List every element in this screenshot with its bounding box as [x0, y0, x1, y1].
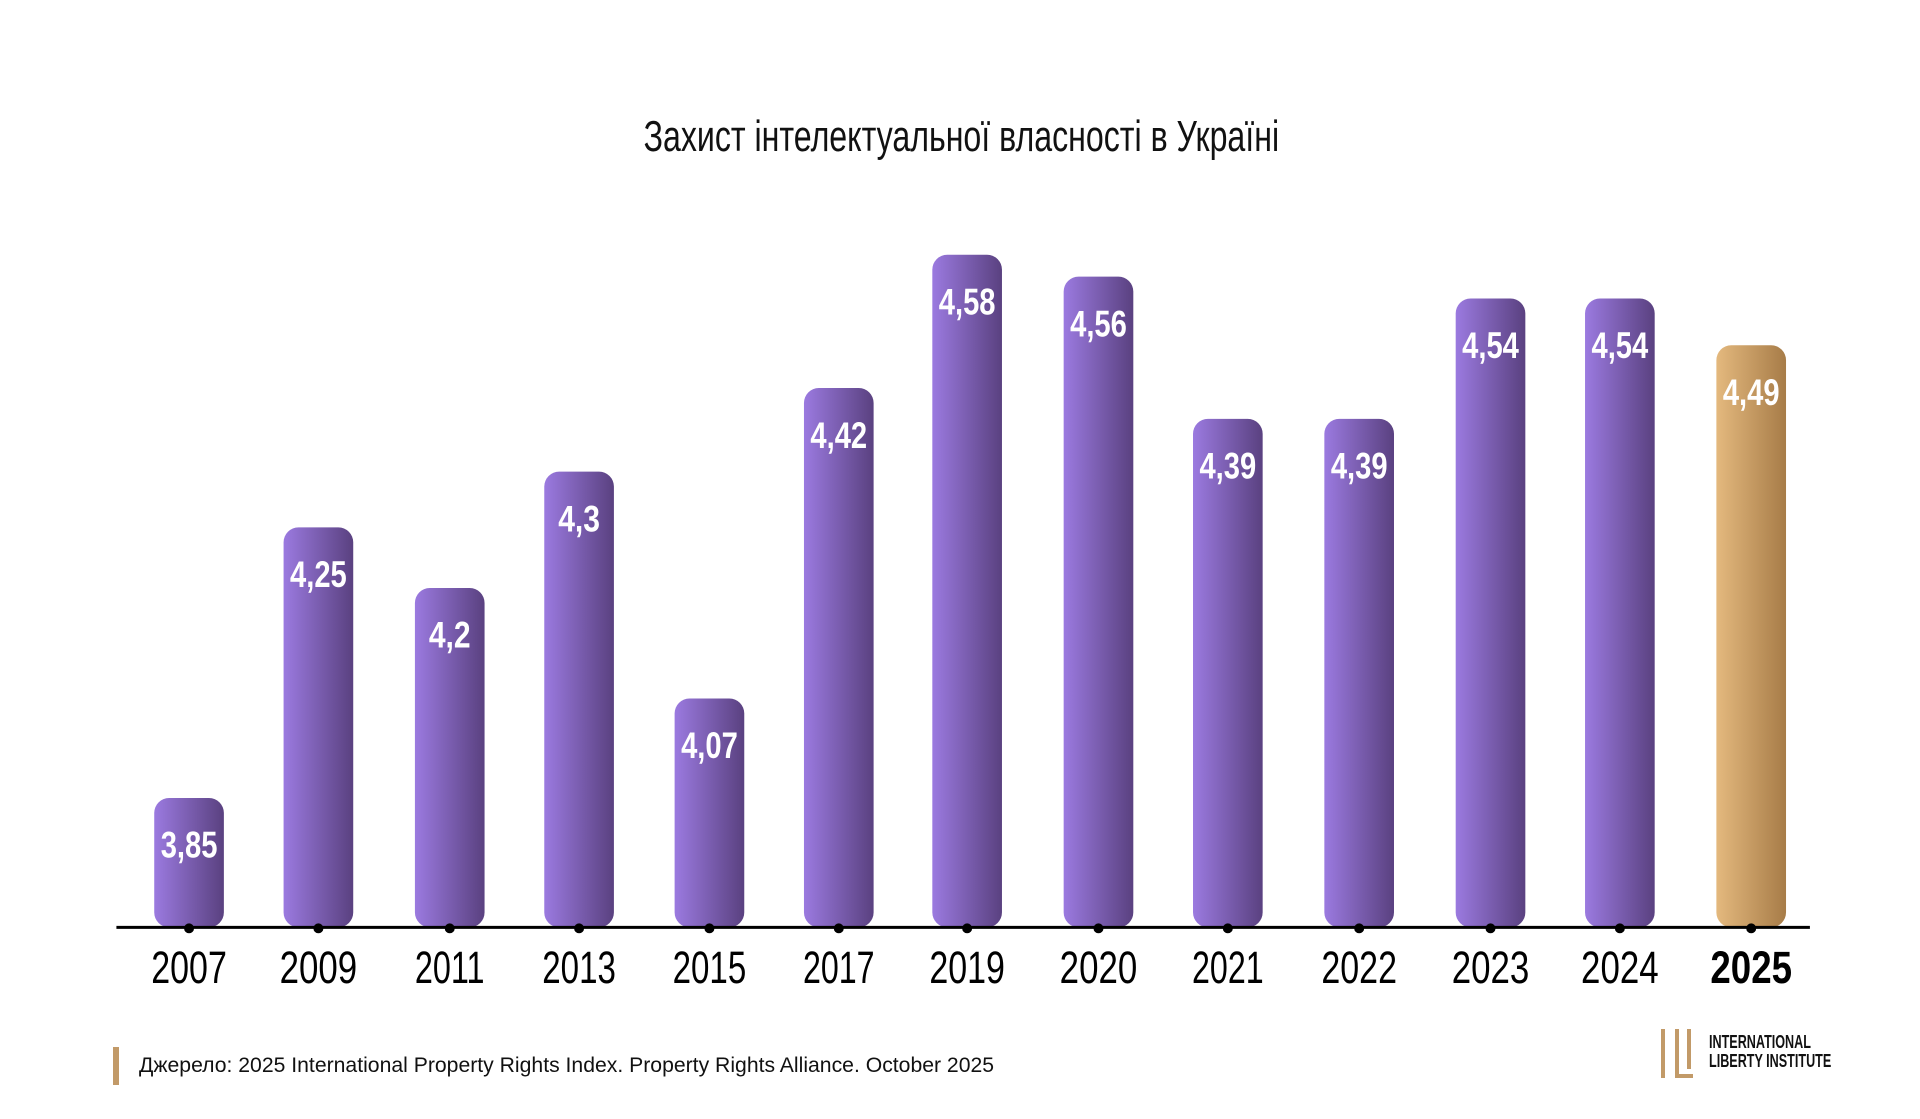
bar 2015	[675, 698, 744, 927]
title: Захист інтелектуальної власності в Україні	[644, 112, 1279, 161]
bar 2023: 4,54	[1462, 325, 1519, 366]
logo text: LIBERTY INSTITUTE	[1709, 1051, 1831, 1071]
year labels: 2019	[929, 942, 1005, 993]
year labels: 2023	[1452, 942, 1529, 993]
logo	[1661, 1029, 1831, 1078]
year labels: 2022	[1321, 942, 1397, 993]
bar 2025: 4,49	[1723, 372, 1780, 413]
bar 2017: 4,42	[810, 415, 867, 456]
bar 2019: 4,58	[939, 281, 995, 322]
year labels: 2015	[673, 942, 746, 993]
bar 2024	[1585, 298, 1655, 927]
bar 2023	[1456, 298, 1525, 927]
year labels: 2021	[1192, 942, 1264, 993]
bar 2020: 4,56	[1070, 303, 1127, 344]
bar 2009	[284, 527, 353, 927]
bar 2021	[1193, 419, 1263, 927]
bar 2021: 4,39	[1199, 446, 1256, 487]
year labels: 2020	[1060, 942, 1137, 993]
year labels: 2017	[803, 942, 875, 993]
bar 2020	[1064, 277, 1133, 927]
bar 2022: 4,39	[1331, 446, 1388, 487]
bar 2011	[415, 588, 485, 927]
logo icon	[1661, 1029, 1693, 1078]
year labels: 2007	[151, 942, 227, 993]
bar 2025	[1716, 345, 1786, 927]
axis	[116, 923, 1810, 933]
year labels: 2011	[415, 942, 485, 993]
bar 2007: 3,85	[161, 825, 217, 866]
bar 2019	[932, 255, 1002, 927]
bar 2022	[1324, 419, 1394, 927]
year labels	[151, 942, 1792, 993]
bar 2024: 4,54	[1592, 325, 1649, 366]
bar 2013: 4,3	[558, 498, 600, 539]
logo text: INTERNATIONAL	[1709, 1032, 1811, 1052]
year labels: 2025	[1710, 942, 1792, 993]
year labels: 2013	[542, 942, 616, 993]
bar 2007	[154, 798, 224, 927]
bar 2015: 4,07	[681, 725, 738, 766]
bar 2017	[804, 388, 874, 927]
bar 2013	[544, 472, 614, 927]
year labels: 2024	[1581, 942, 1659, 993]
source text: Джерело: 2025 International Property Rights Index. Property Rights Alliance. October 2025	[139, 1053, 994, 1077]
year labels: 2009	[280, 942, 357, 993]
source accent bar	[113, 1047, 119, 1085]
bar 2011: 4,2	[429, 615, 471, 656]
logo text	[1709, 1032, 1831, 1071]
bar 2009: 4,25	[290, 554, 347, 595]
